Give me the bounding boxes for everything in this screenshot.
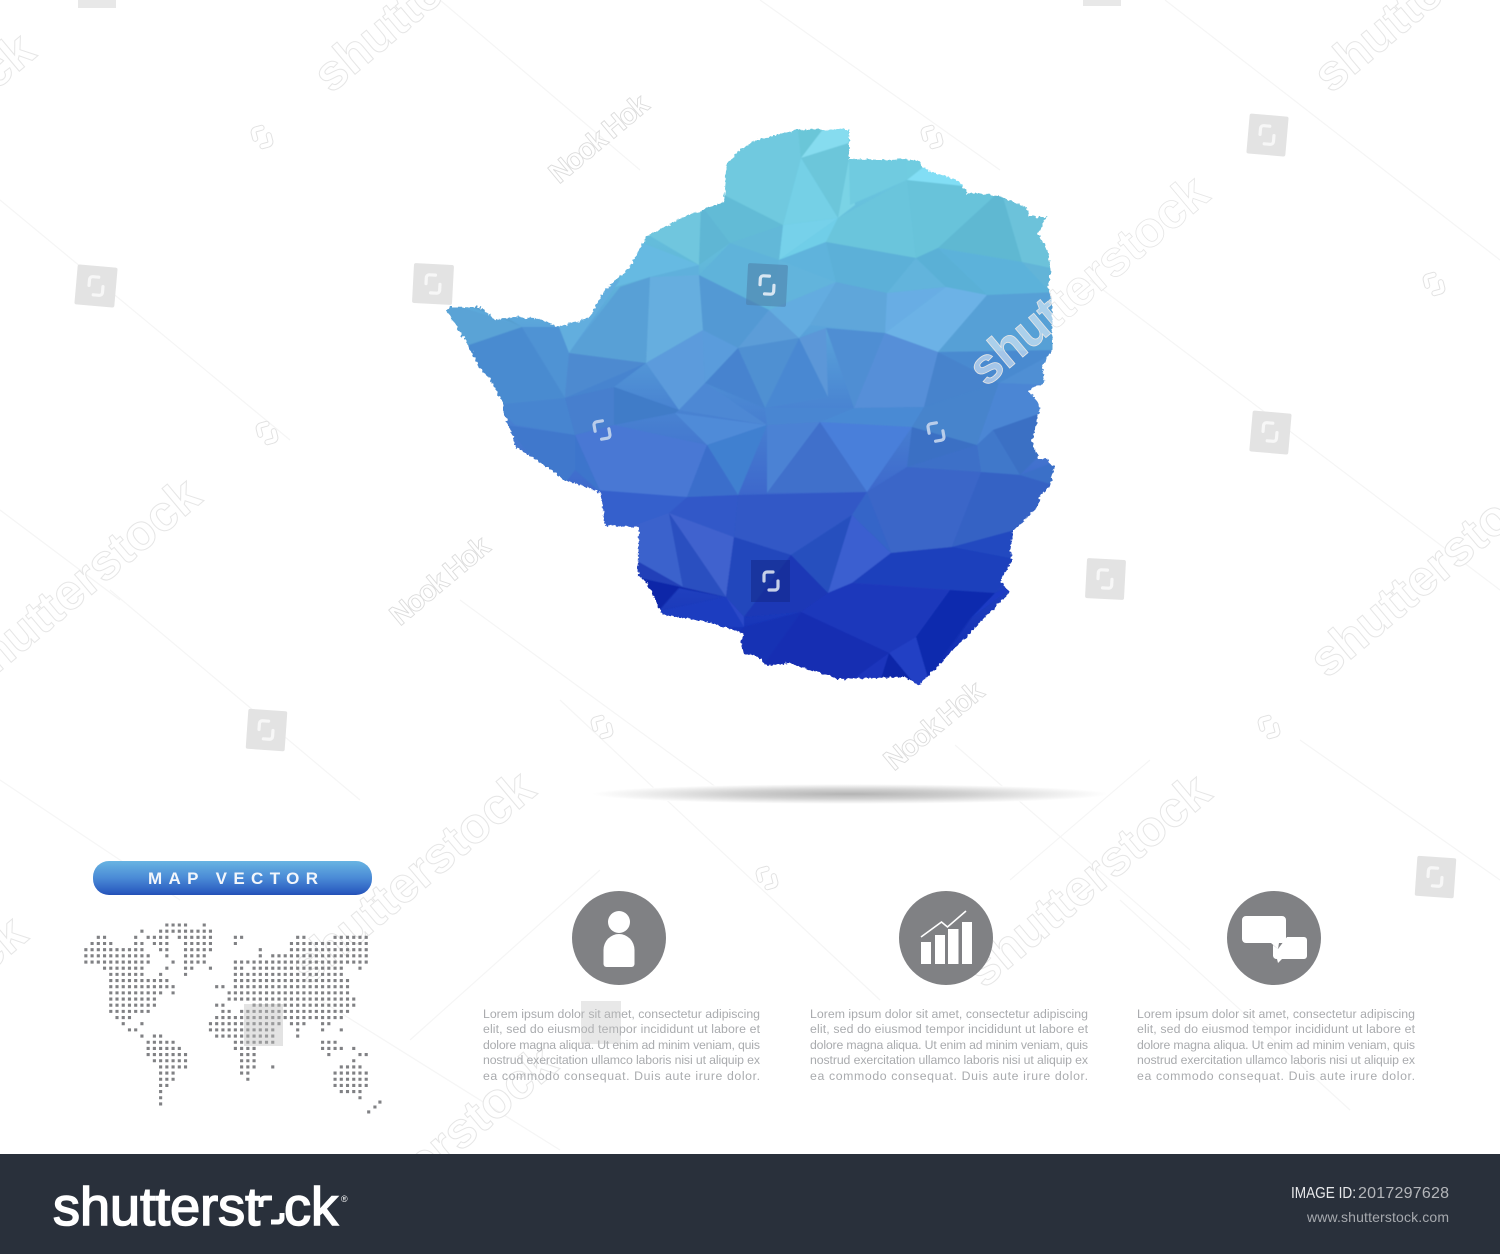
watermark: small outline marks: [253, 126, 1443, 889]
watermark: author name: [384, 88, 991, 777]
text block 1: elit, sed do eiusmod tempor incididunt ut labore et: [483, 1022, 761, 1036]
button: map vector: MAP VECTOR: [148, 869, 318, 888]
watermark: author name: Nook Hok: [543, 88, 656, 190]
image id: [1291, 1185, 1449, 1202]
text block 1: dolore magna aliqua. Ut enim ad minim veniam, quis: [483, 1038, 760, 1052]
button: map vector: [93, 861, 372, 895]
text block 3: dolore magna aliqua. Ut enim ad minim veniam, quis: [1137, 1038, 1415, 1052]
text block 1: [483, 1007, 761, 1083]
logo: shutterst: [53, 1177, 260, 1237]
text block 1: nostrud exercitation ullamco laboris nisi ut aliquip ex: [483, 1053, 761, 1067]
watermark marks over the map: [594, 263, 944, 602]
image id: 2017297628: [1358, 1185, 1449, 1202]
text block 3: elit, sed do eiusmod tempor incididunt ut labore et: [1137, 1022, 1416, 1036]
text block 2: Lorem ipsum dolor sit amet, consectetur adipiscing: [810, 1007, 1088, 1021]
text block 2: dolore magna aliqua. Ut enim ad minim veniam, quis: [810, 1038, 1088, 1052]
feature column 2: [810, 891, 1089, 1083]
text block 2: ea commodo consequat. Duis aute irure dolor.: [810, 1069, 1088, 1083]
logo: ck: [284, 1177, 339, 1237]
text block 2: nostrud exercitation ullamco laboris nisi ut aliquip ex: [810, 1053, 1089, 1067]
world map watermark square: [244, 1004, 283, 1046]
watermark: diagonal brand text: shutterstock: [279, 759, 545, 995]
text block 3: [1137, 1007, 1416, 1083]
dotted world map: [84, 925, 385, 1112]
text block 2: elit, sed do eiusmod tempor incididunt ut labore et: [810, 1022, 1089, 1036]
low-poly country map: [446, 128, 1055, 686]
watermark: grey squares: [74, 0, 1456, 898]
text block 3: Lorem ipsum dolor sit amet, consectetur adipiscing: [1137, 1007, 1415, 1021]
text block 3: nostrud exercitation ullamco laboris nisi ut aliquip ex: [1137, 1053, 1416, 1067]
watermark: author name: Nook Hok: [384, 530, 497, 632]
watermark: brand text across map edge: shutterstock: [957, 164, 1219, 396]
text block 3: ea commodo consequat. Duis aute irure dolor.: [1137, 1069, 1415, 1083]
watermark: author name: Nook Hok: [878, 675, 991, 777]
footer bar: [0, 1154, 1500, 1254]
icon: bar chart: [899, 891, 993, 985]
icon: speech bubbles: [1227, 891, 1321, 985]
feature column 1: [483, 891, 761, 1083]
feature column 3: [1137, 891, 1416, 1083]
icon: person: [572, 891, 666, 985]
text watermark square: [581, 1001, 621, 1044]
watermark: diagonal brand text: shutterstock: [955, 762, 1221, 998]
floating shadow under map: [592, 784, 1108, 804]
image id: IMAGE ID:: [1291, 1185, 1356, 1202]
text block 2: [810, 1007, 1089, 1083]
logo: ®: [341, 1194, 348, 1204]
text block 1: Lorem ipsum dolor sit amet, consectetur adipiscing: [483, 1007, 760, 1021]
website: www.shutterstock.com: [1306, 1209, 1449, 1225]
text block 1: ea commodo consequat. Duis aute irure dolor.: [483, 1069, 760, 1083]
